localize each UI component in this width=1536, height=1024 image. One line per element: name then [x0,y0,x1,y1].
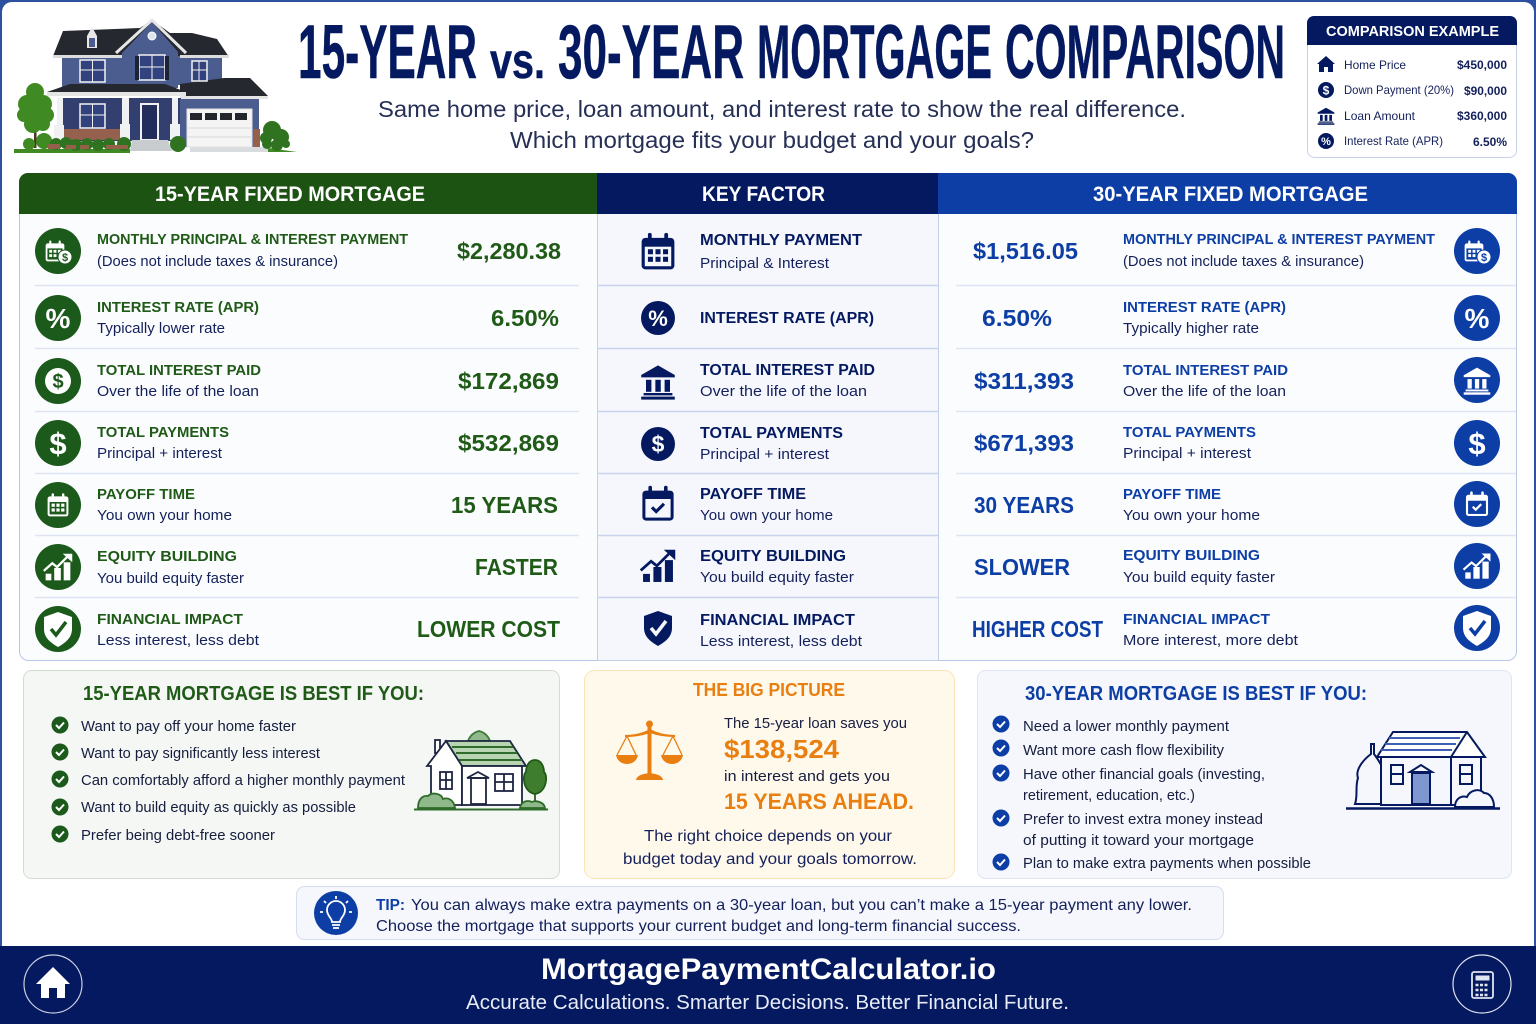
panel: 15-year column rows: TOTAL INTEREST PAID [97,362,261,379]
panel: 15-year column rows: $532,869 [458,430,559,456]
panel: comparison example: 6.50% [1473,135,1507,149]
icon: bank [1454,357,1500,403]
icon: calculator [1453,955,1511,1013]
icon: loan amount [1318,108,1334,125]
icon: dollar coin: $ [52,371,64,393]
panel: the big picture [584,670,954,878]
subtitle: Which mortgage fits your budget and your goals? [510,127,1034,153]
checklist: Have other financial goals (investing, [1023,766,1265,783]
panel: comparison example: Interest Rate (APR) [1344,134,1443,148]
panel: key factor column rows: PAYOFF TIME [700,486,806,503]
panel: 15-year column rows: INTEREST RATE (APR) [97,299,259,316]
icon: green house [414,731,548,810]
icon: dollar [35,420,81,466]
icon: interest rate: % [1321,136,1331,148]
checklist: Need a lower monthly payment [1023,718,1230,735]
tip callout: Choose the mortgage that supports your current budget and long-term financial success. [376,918,1021,935]
panel: key factor column rows: FINANCIAL IMPACT [700,612,855,629]
icon: dollar [1454,420,1500,466]
checklist: Want more cash flow flexibility [1023,742,1224,759]
icon: down payment [1318,82,1334,98]
tip callout [296,886,1224,940]
panel: 15-year column rows: MONTHLY PRINCIPAL & INTEREST PAYMENT [97,231,408,248]
icon: down payment: $ [1323,84,1330,98]
panel: 30-year column rows: $311,393 [974,368,1074,394]
panel: key factor column rows: Less interest, less debt [700,633,863,650]
icon: calendar [35,482,81,528]
icon: calendar dollar [1454,228,1500,274]
panel: 30-year column rows: INTEREST RATE (APR) [1123,299,1286,316]
footer band [0,946,1536,1024]
panel: 30-year column rows: TOTAL INTEREST PAID [1123,362,1288,379]
panel: 15-year column rows: You build equity faster [97,570,244,587]
icon: dollar: $ [652,431,665,457]
icon: growth chart [641,550,675,582]
panel: 15-year column rows: 15 YEARS [451,492,558,518]
icon: percent: % [648,306,668,331]
checklist: Want to pay off your home faster [81,718,296,735]
panel: 15-year column rows: FINANCIAL IMPACT [97,611,243,628]
panel: comparison example: Home Price [1344,58,1406,72]
checklist: retirement, education, etc.) [1023,787,1195,804]
panel: comparison example: $450,000 [1457,58,1507,72]
panel: 15-year column rows: 6.50% [491,305,559,331]
icon: home price [1317,56,1335,72]
checklist: Prefer to invest extra money instead [1023,811,1263,828]
panel: comparison example: $90,000 [1464,84,1507,98]
panel: the big picture: The right choice depends on your [644,828,893,845]
panel: 30-year column rows: Over the life of the loan [1123,383,1286,400]
panel: comparison example: Loan Amount [1344,109,1416,123]
checklist: of putting it toward your mortgage [1023,832,1254,849]
heading: key factor column: KEY FACTOR [702,183,825,206]
icon: calendar dollar [35,228,81,274]
comparison table frame [19,173,1517,660]
panel: comparison example: COMPARISON EXAMPLE [1326,23,1499,40]
icon: bank [641,365,675,400]
icon: balance scales [616,720,683,780]
panel: key factor column rows: MONTHLY PAYMENT [700,232,862,249]
panel: key factor column rows: Principal & Interest [700,255,830,272]
tip callout: You can always make extra payments on a 30-year loan, but you can’t make a 15-year payment any lower. [411,897,1192,914]
icon: shield [644,611,672,646]
panel: 30-year column rows: $671,393 [974,430,1074,456]
icon: light bulb [314,891,358,935]
tip callout: TIP: [376,897,405,914]
panel: the big picture: in interest and gets you [724,768,890,785]
panel: key factor column rows: EQUITY BUILDING [700,548,846,565]
checklist: Want to build equity as quickly as possible [81,799,356,816]
icon: percent: % [1465,303,1490,334]
icon: dollar: $ [49,426,67,461]
panel: key factor column rows: Over the life of the loan [700,383,867,400]
panel: comparison example: Down Payment (20%) [1344,83,1454,97]
panel: the big picture: 15 YEARS AHEAD. [724,789,914,814]
icon: blue house [1346,732,1500,808]
header house illustration [14,20,297,153]
icon: interest rate [1318,133,1334,149]
panel: comparison example [1307,16,1517,158]
panel: comparison example: $360,000 [1457,109,1507,123]
panel: 15-year column rows: $2,280.38 [457,238,561,264]
panel: 30-year column rows [972,228,1500,651]
panel: 15-year column rows: $172,869 [458,368,559,394]
panel: 30-year column rows: FINANCIAL IMPACT [1123,611,1270,628]
icon: home [24,955,82,1013]
icon: dollar: $ [1468,426,1486,461]
title: COMPARISON [1005,10,1285,95]
panel: 30-year column rows: 30 YEARS [974,492,1074,518]
panel: 30-year column rows: EQUITY BUILDING [1123,547,1260,564]
icon: dollar coin [35,358,81,404]
panel: 30-year column rows: HIGHER COST [972,616,1103,642]
checklist: Want to pay significantly less interest [81,745,321,762]
panel: 15-year column rows: EQUITY BUILDING [97,548,237,565]
footer band: Accurate Calculations. Smarter Decisions. Better Financial Future. [466,991,1069,1014]
panel: 30-year column rows: $1,516.05 [973,238,1078,264]
panel: 15-year column rows: Over the life of the loan [97,383,259,400]
panel: 30-year column rows: Typically higher rate [1123,320,1259,337]
icon: percent: % [46,303,71,334]
checklist: Plan to make extra payments when possible [1023,855,1311,872]
panel: 15-year column rows: Less interest, less debt [97,632,260,649]
panel: key factor column rows: INTEREST RATE (APR) [700,310,874,327]
panel: 15-year column rows: Typically lower rate [97,320,225,337]
panel: 30-year best if: 30-YEAR MORTGAGE IS BEST IF YOU: [1025,683,1367,705]
panel: the big picture: THE BIG PICTURE [693,680,845,700]
panel: 15-year best if [24,670,560,878]
panel: 15-year column rows: TOTAL PAYMENTS [97,424,229,441]
panel: key factor column rows: TOTAL PAYMENTS [700,425,843,442]
panel: key factor column rows: TOTAL INTEREST PAID [700,362,875,379]
icon: calendar check [1454,481,1500,527]
icon: dollar [641,427,675,461]
panel: 30-year column rows: You build equity faster [1123,569,1275,586]
panel: 15-year column rows: You own your home [97,507,232,524]
footer band: MortgagePaymentCalculator.io [541,953,996,986]
title [298,10,1285,95]
icon: shield [1454,605,1500,651]
panel: 30-year column rows: (Does not include taxes & insurance) [1123,253,1364,270]
icon: percent [641,301,675,335]
panel: 30-year column rows: Principal + interest [1123,445,1252,462]
subtitle [378,96,1186,153]
title: vs. [490,33,545,89]
panel: 30-year column rows: MONTHLY PRINCIPAL & INTEREST PAYMENT [1123,231,1435,248]
subtitle: Same home price, loan amount, and interest rate to show the real difference. [378,96,1186,122]
heading: 30-year column: 30-YEAR FIXED MORTGAGE [1093,183,1368,206]
checklist: Can comfortably afford a higher monthly payment [81,772,406,789]
panel: 15-year column rows: LOWER COST [417,616,560,642]
icon: calendar [642,233,674,269]
panel: 15-year column rows: PAYOFF TIME [97,486,195,503]
icon: growth chart [35,544,81,590]
panel: 15-year column rows: (Does not include taxes & insurance) [97,253,338,270]
icon: growth chart [1454,543,1500,589]
checklist [992,716,1311,872]
panel: key factor column rows: You own your home [700,507,833,524]
icon: calendar check [642,486,674,521]
panel: the big picture: budget today and your goals tomorrow. [623,851,917,868]
panel: 30-year column rows: SLOWER [974,554,1070,580]
panel: 15-year best if: 15-YEAR MORTGAGE IS BEST IF YOU: [83,683,424,705]
checklist: Prefer being debt-free sooner [81,827,275,844]
panel: the big picture: The 15-year loan saves you [724,715,907,732]
icon: calendar dollar: $ [1481,252,1487,264]
title: 30-YEAR [558,10,744,95]
panel: 30-year column rows: TOTAL PAYMENTS [1123,424,1256,441]
panel: 30-year column rows: 6.50% [982,305,1052,331]
heading: 15-year column: 15-YEAR FIXED MORTGAGE [155,183,425,206]
panel: 30-year best if [978,670,1512,878]
panel: 30-year column rows: More interest, more debt [1123,632,1299,649]
title: MORTGAGE [757,10,992,95]
panel: 15-year column rows: Principal + interest [97,445,223,462]
panel: the big picture: $138,524 [724,734,840,764]
panel: 30-year column rows: You own your home [1123,507,1260,524]
panel: 30-year column rows: PAYOFF TIME [1123,486,1221,503]
panel: 15-year column rows: FASTER [475,554,558,580]
icon: shield [35,606,81,652]
panel: key factor column rows [641,232,875,650]
panel: 15-year column rows [35,228,561,652]
title: 15-YEAR [298,10,477,95]
panel: key factor column rows: You build equity faster [700,569,854,586]
icon: percent [1454,295,1500,341]
icon: percent [35,295,81,341]
checklist [52,716,406,844]
icon: calendar dollar: $ [62,252,68,264]
panel: key factor column rows: Principal + interest [700,446,830,463]
